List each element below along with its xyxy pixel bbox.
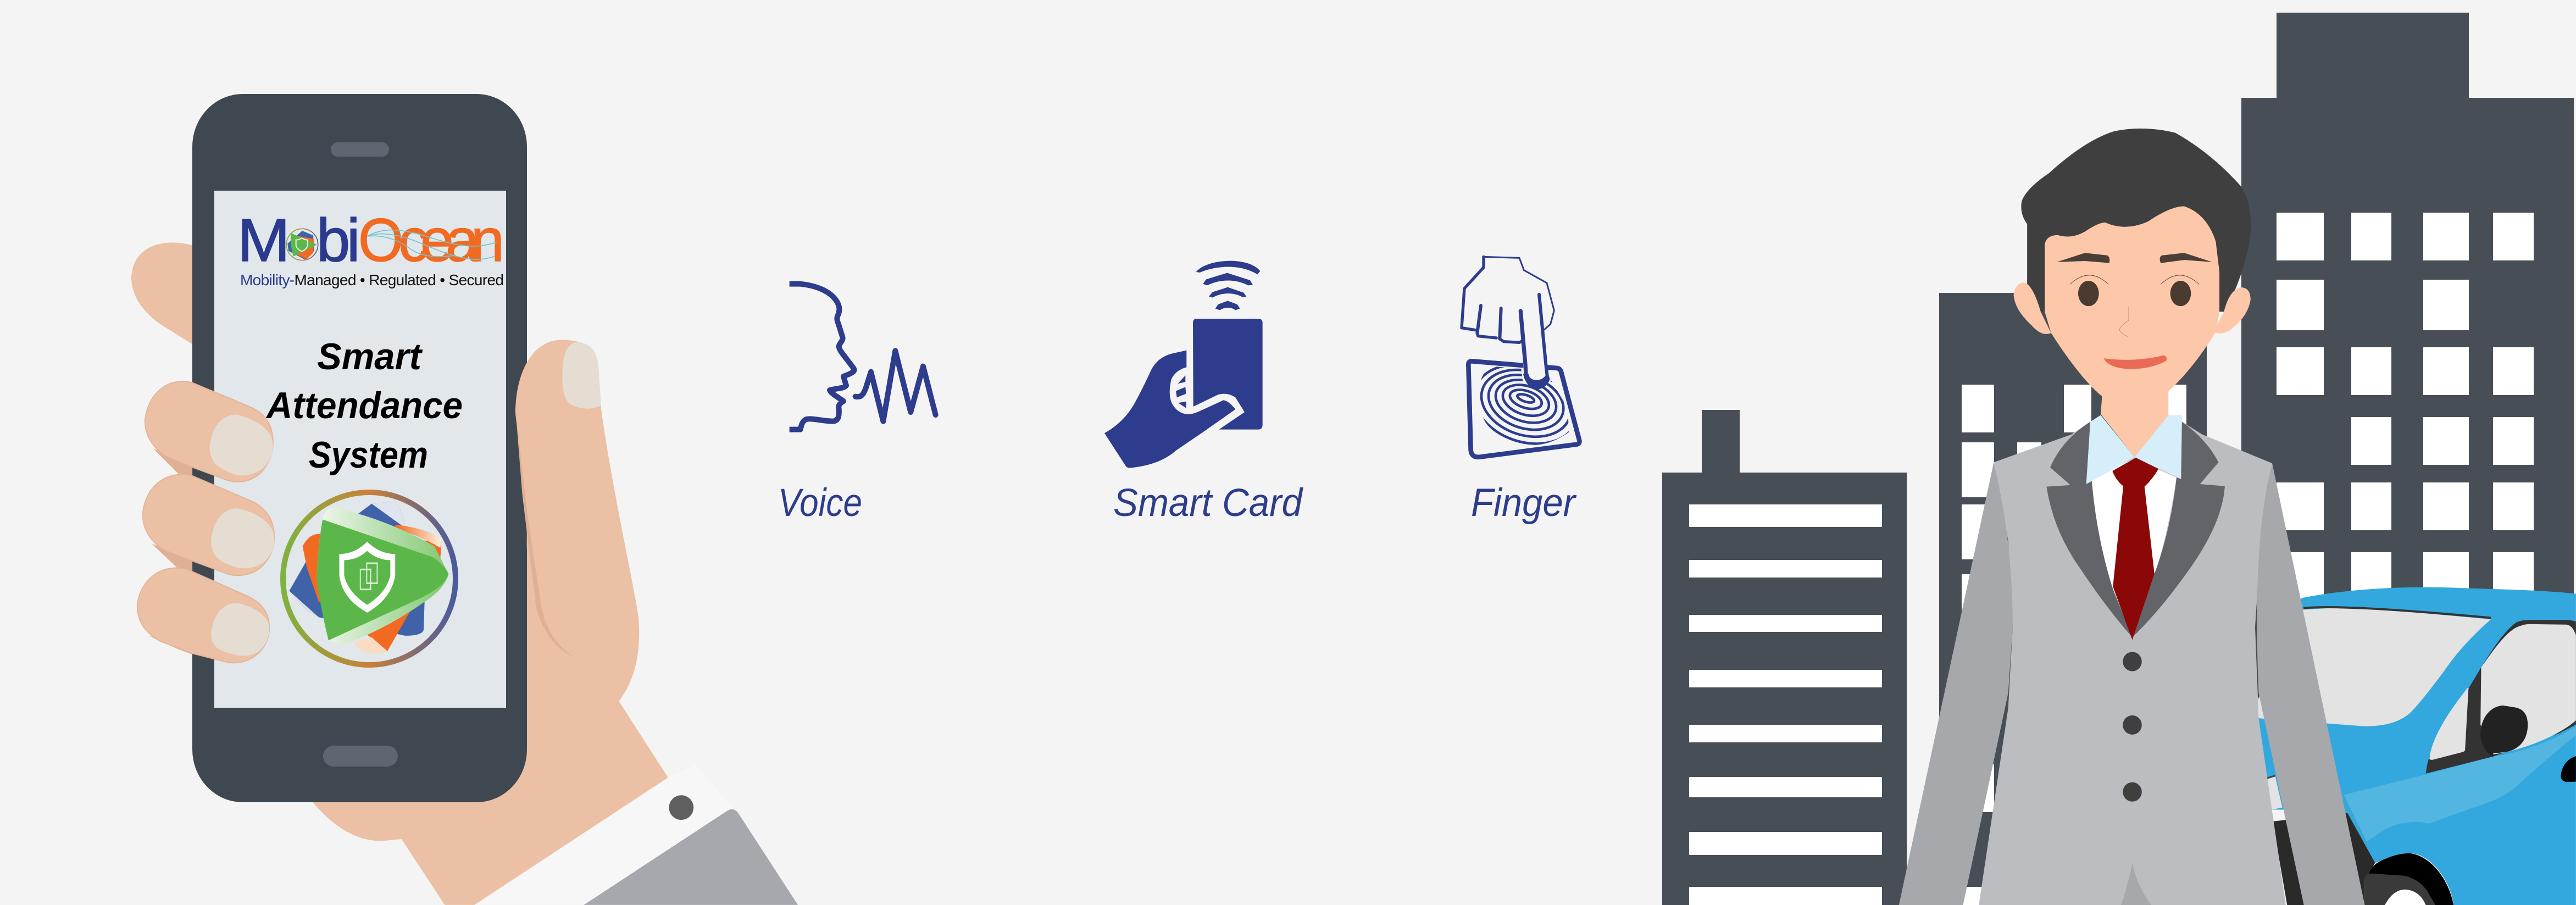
- icon: smart card: [1104, 261, 1263, 468]
- eyes: [2078, 281, 2191, 306]
- fingerprint: [1480, 367, 1569, 445]
- jacket torso: [1979, 415, 2286, 905]
- icon: voice: [790, 284, 936, 430]
- car: [2257, 587, 2576, 905]
- MobiOcean logo: Mobility-Managed • Regulated • Secured: [240, 271, 504, 288]
- icon labels: Finger: [1471, 481, 1577, 525]
- pointing hand: [1462, 257, 1554, 390]
- hair: [2021, 129, 2251, 312]
- MobiOcean logo: bi: [317, 207, 360, 274]
- wheel: [2364, 853, 2453, 905]
- MobiOcean logo: cean: [398, 207, 504, 274]
- jacket buttons: [2123, 652, 2142, 802]
- card: [1193, 319, 1263, 430]
- MobiOcean logo: O: [358, 207, 403, 274]
- icon labels: Voice: [778, 481, 862, 525]
- icon labels: Smart Card: [1113, 481, 1303, 525]
- scanner pad: [1468, 361, 1579, 457]
- logo mark small: [286, 229, 318, 260]
- signal arcs: [1196, 261, 1260, 310]
- building: middle: [1939, 293, 2207, 905]
- phone: [192, 94, 527, 802]
- icon: finger on scanner: [1460, 255, 1582, 459]
- collar: [2086, 415, 2182, 484]
- screen heading: Smart Attendance System: Smart: [317, 336, 423, 377]
- screen heading: Smart Attendance System: Attendance: [265, 385, 463, 426]
- hand: front fingers and thumb: [137, 340, 611, 663]
- face: [2045, 206, 2219, 457]
- MobiOcean logo: [237, 207, 504, 288]
- nose: [2119, 307, 2129, 336]
- businessman: [1899, 129, 2365, 905]
- eyebrows: [2057, 253, 2212, 263]
- windshield: [2257, 608, 2491, 726]
- hand: fingers and palm behind phone: [131, 243, 798, 905]
- icon labels: [778, 481, 1577, 525]
- building: left: [1662, 410, 1907, 905]
- MobiOcean logo: M: [237, 207, 290, 274]
- holding hand: [1104, 351, 1235, 468]
- MobiOcean logo: o: [291, 229, 309, 265]
- logo wave lines: [367, 230, 497, 259]
- side windows: [2426, 667, 2493, 774]
- sleeves: [1899, 462, 2013, 905]
- screen heading: Smart Attendance System: System: [309, 434, 428, 476]
- ears: [2013, 282, 2251, 334]
- mouth: [2104, 356, 2167, 369]
- building: right: [2241, 13, 2574, 757]
- shield emblem: [283, 492, 456, 665]
- lapels: [2046, 422, 2225, 637]
- jacket vent: [2121, 863, 2151, 905]
- tie: [2112, 458, 2158, 640]
- screen heading: Smart Attendance System: [265, 336, 463, 476]
- shirt: [2092, 459, 2177, 637]
